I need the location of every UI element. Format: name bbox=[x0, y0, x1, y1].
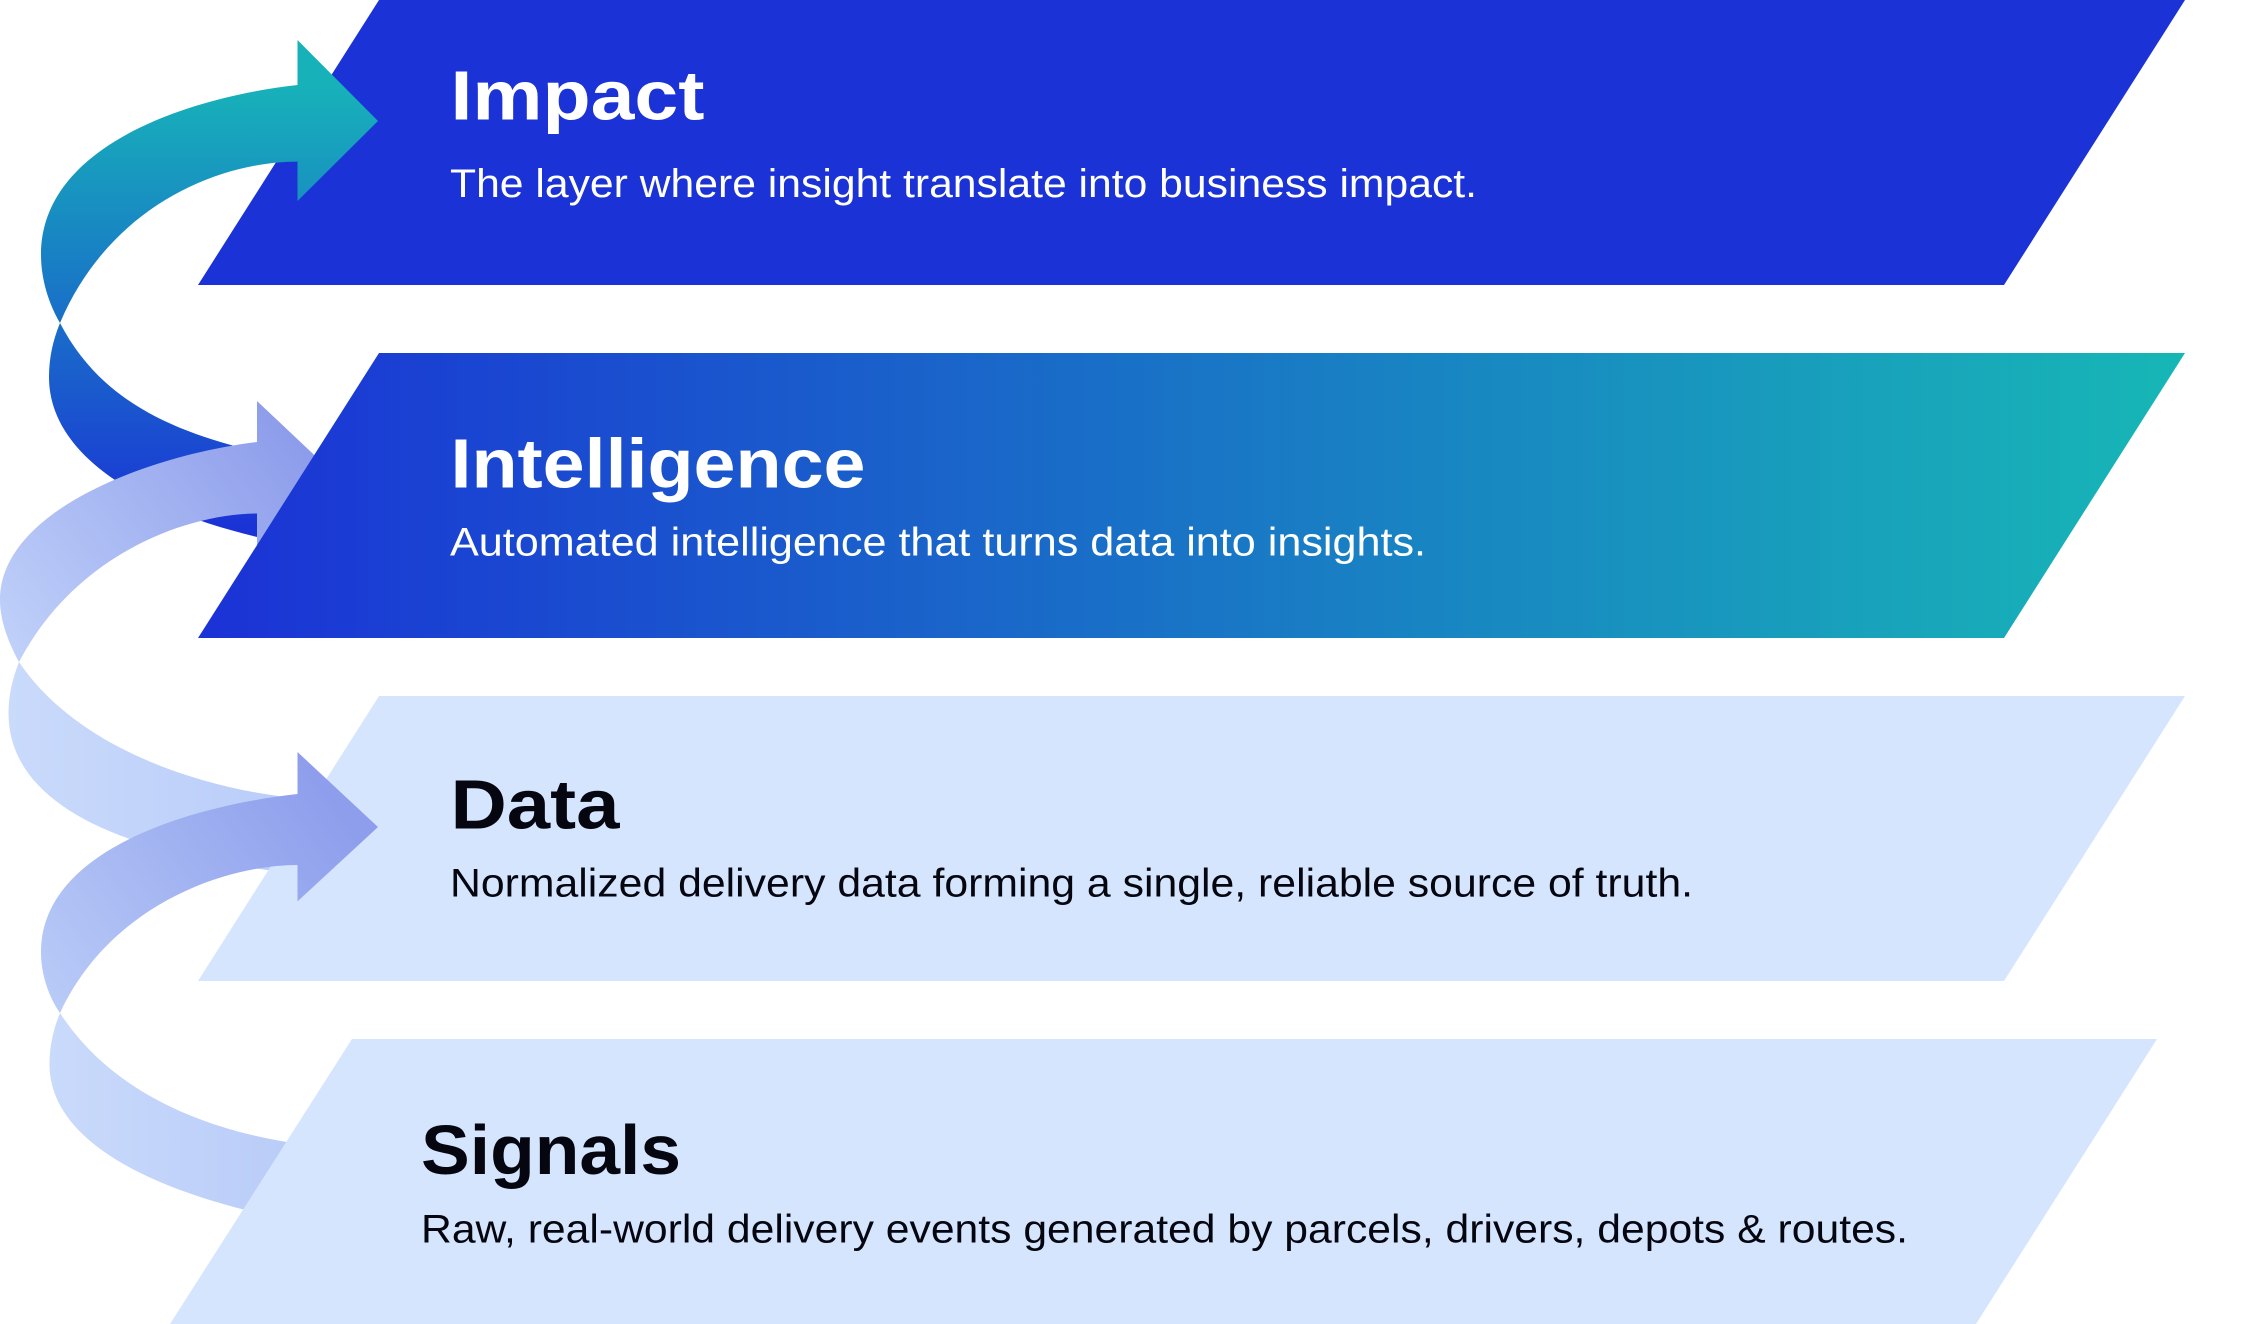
heading: Signals: Signals bbox=[421, 1111, 681, 1189]
arrow: from Data to Intelligence bbox=[0, 401, 336, 871]
text: Data description: Normalized delivery data forming a single, reliable source of truth. bbox=[450, 862, 1693, 906]
panel: Data bbox=[198, 696, 2185, 981]
text: Intelligence description: Automated intelligence that turns data into insights. bbox=[450, 520, 1426, 564]
heading: Intelligence: Intelligence bbox=[450, 424, 866, 502]
panel: Signals bbox=[170, 1039, 2157, 1324]
text: Signals description: Raw, real-world delivery events generated by parcels, drivers, depots & routes. bbox=[421, 1208, 1908, 1252]
text: Impact description: The layer where insight translate into business impact. bbox=[450, 162, 1477, 206]
arrow: from Intelligence to Impact bbox=[41, 40, 378, 541]
panel: Intelligence bbox=[198, 353, 2185, 638]
panel: Impact bbox=[198, 0, 2185, 285]
arrow: from Signals to Data bbox=[41, 752, 378, 1220]
heading: Impact: Impact bbox=[450, 56, 704, 134]
heading: Data: Data bbox=[450, 766, 621, 844]
